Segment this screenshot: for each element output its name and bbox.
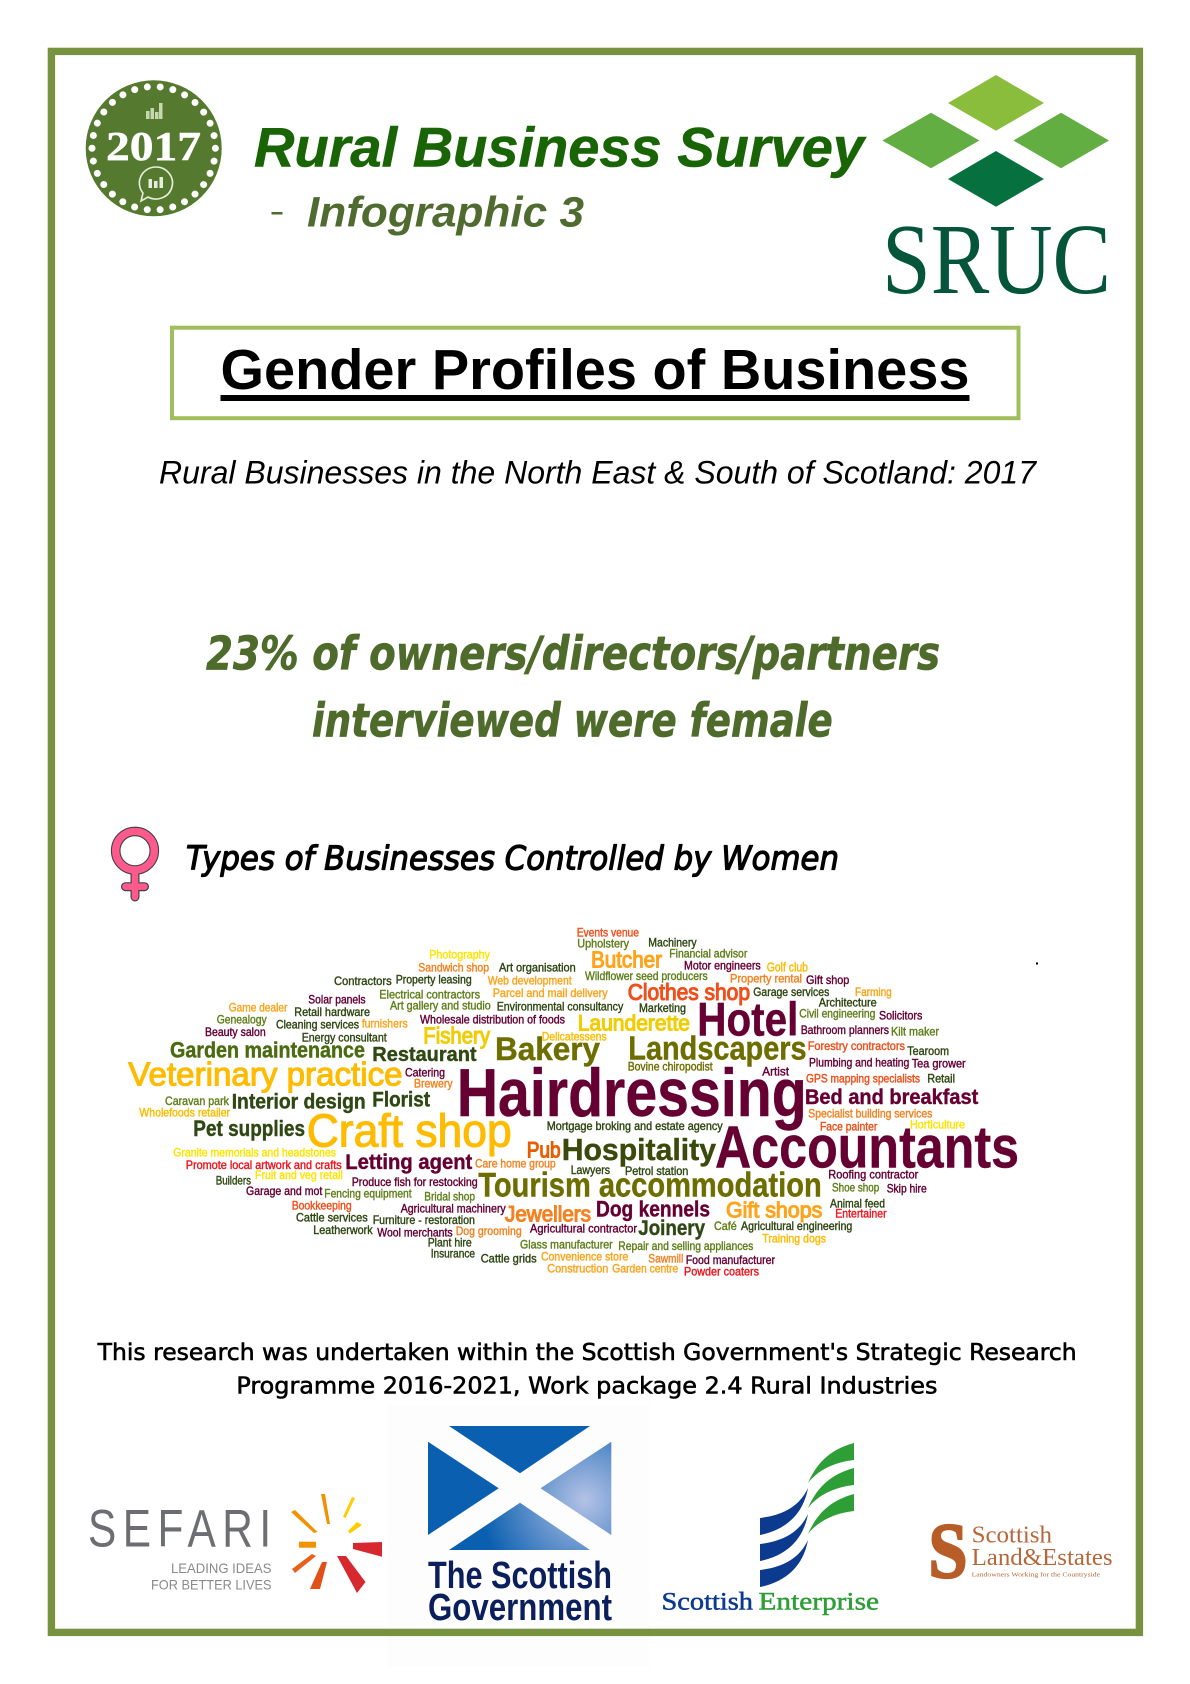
logo: Scottish Enterprise — [662, 1443, 879, 1615]
word cloud: types of businesses: GPS mapping specialists — [806, 1071, 920, 1085]
logo: Scottish Land & Estates — [928, 1507, 1113, 1594]
word cloud: types of businesses: Garage services — [753, 985, 829, 999]
icon: 2017 survey badge — [86, 80, 222, 216]
word cloud: types of businesses: Cattle grids — [481, 1251, 537, 1265]
word cloud: types of businesses: Financial advisor — [669, 947, 747, 961]
word cloud: types of businesses: Clothes shop — [628, 979, 750, 1005]
text block: research credit: This research was undertaken within the Scottish Government's Strategic Research — [97, 1340, 1077, 1366]
icon: female symbol — [116, 831, 154, 897]
word cloud: types of businesses: Repair and selling appliances — [618, 1239, 753, 1253]
word cloud: types of businesses: Garage and mot — [246, 1184, 323, 1198]
text block: research credit: Programme 2016-2021, Work package 2.4 Rural Industries — [236, 1373, 937, 1399]
word cloud: types of businesses: Restaurant — [372, 1044, 477, 1066]
logo: SRUC — [882, 75, 1111, 315]
word cloud: types of businesses: Horticulture — [910, 1117, 965, 1131]
word cloud: types of businesses: Builders — [216, 1174, 251, 1188]
word cloud: types of businesses: Butcher — [591, 947, 662, 973]
word cloud: types of businesses — [128, 926, 1038, 1278]
word cloud: types of businesses: Dog grooming — [456, 1224, 522, 1238]
word cloud: types of businesses: Leatherwork — [313, 1223, 373, 1237]
word cloud: types of businesses: Pub — [527, 1137, 561, 1162]
word cloud: types of businesses: Florist — [372, 1089, 430, 1112]
word cloud: types of businesses: Bovine chiropodist — [628, 1060, 713, 1074]
word cloud: types of businesses: Hairdressing — [457, 1055, 807, 1131]
word cloud: types of businesses: Forestry contractors — [808, 1039, 905, 1053]
word cloud: types of businesses: Animal feed — [830, 1196, 885, 1210]
word cloud: types of businesses: Mortgage broking and estate agency — [547, 1119, 723, 1133]
word cloud: types of businesses: Caravan park — [165, 1094, 230, 1108]
word cloud: types of businesses: Electrical contractors — [379, 987, 480, 1001]
word cloud: types of businesses: Gift shops — [726, 1197, 822, 1222]
word cloud: types of businesses: Architecture — [819, 996, 877, 1010]
key statistic: 23% female — [206, 626, 940, 748]
logo: The Scottish Government: Government — [428, 1587, 612, 1629]
word cloud: types of businesses: Marketing — [639, 1001, 686, 1015]
word cloud: types of businesses: Artist — [762, 1065, 790, 1079]
word cloud: types of businesses: Sawmill — [648, 1251, 683, 1265]
logo: SEFARI: FOR BETTER LIVES — [151, 1576, 272, 1592]
word cloud: types of businesses: Promote local artwork and crafts — [186, 1158, 342, 1172]
word cloud: types of businesses: Shoe shop — [832, 1181, 880, 1195]
word cloud: types of businesses: Lawyers — [571, 1163, 610, 1177]
logo: SRUC: SRUC — [882, 203, 1111, 315]
word cloud: types of businesses: Tourism accommodation — [478, 1167, 822, 1205]
icon: 2017 survey badge: 2017 — [106, 123, 201, 169]
word cloud: types of businesses: Plumbing and heating — [809, 1056, 909, 1070]
key statistic: 23% female: 23% of owners/directors/partners — [206, 626, 940, 680]
word cloud: types of businesses: Fishery — [423, 1022, 490, 1048]
logo: Scottish Land & Estates: Landowners Working for the Countryside — [972, 1572, 1100, 1579]
word cloud: types of businesses: Furniture - restoration — [373, 1213, 475, 1227]
word cloud: types of businesses: Skip hire — [887, 1181, 927, 1195]
logo: Scottish Enterprise: Scottish — [662, 1588, 754, 1615]
word cloud: types of businesses: Bathroom planners — [801, 1023, 889, 1037]
word cloud: types of businesses: Cattle services — [296, 1211, 368, 1225]
word cloud: types of businesses: Bookkeeping — [292, 1198, 352, 1212]
word cloud: types of businesses: Garden centre — [612, 1262, 679, 1276]
word cloud: types of businesses: Machinery — [648, 936, 697, 950]
word cloud: types of businesses: Dog kennels — [596, 1197, 710, 1222]
word cloud: types of businesses: Game dealer — [229, 1001, 287, 1015]
key statistic: 23% female: interviewed were female — [312, 694, 833, 748]
word cloud: types of businesses: Brewery — [414, 1076, 453, 1090]
word cloud: types of businesses: Agricultural machinery — [401, 1201, 506, 1215]
word cloud: types of businesses: Art organisation — [499, 961, 576, 975]
word cloud: types of businesses: Wool merchants — [377, 1226, 453, 1240]
word cloud: types of businesses: Café — [714, 1219, 737, 1233]
word cloud: types of businesses: Accountants — [715, 1114, 1019, 1180]
word cloud: types of businesses: Agricultural contractor — [530, 1221, 637, 1235]
word cloud: types of businesses: Parcel and mail delivery — [493, 986, 608, 1000]
word cloud: types of businesses: Environmental consultancy — [497, 999, 623, 1013]
word cloud: types of businesses: Letting agent — [345, 1151, 472, 1174]
word cloud: types of businesses: Insurance — [431, 1246, 475, 1260]
word cloud: types of businesses: Kilt maker — [891, 1025, 939, 1039]
heading box: Gender Profiles of Business — [172, 328, 1018, 418]
subtitle: Infographic 3: Infographic 3 — [307, 189, 584, 237]
word cloud: types of businesses: Solar panels — [308, 992, 366, 1006]
word cloud: types of businesses: Specialist building services — [808, 1106, 932, 1120]
logo: Scottish Land & Estates: S — [928, 1507, 968, 1594]
word cloud: types of businesses: Contractors — [334, 974, 392, 988]
word cloud: types of businesses: Entertainer — [835, 1207, 887, 1221]
word cloud: types of businesses: Upholstery — [577, 937, 629, 951]
word cloud: types of businesses: Golf club — [767, 960, 808, 975]
word cloud: types of businesses: Property rental — [730, 972, 802, 986]
logo: SEFARI: LEADING IDEAS — [171, 1560, 272, 1576]
word cloud: types of businesses: Training dogs — [762, 1232, 826, 1246]
text block: research credit — [97, 1340, 1077, 1399]
word cloud: types of businesses: Beauty salon — [205, 1025, 266, 1039]
word cloud: types of businesses: Landscapers — [628, 1029, 807, 1066]
word cloud: types of businesses: Fruit and veg retail — [255, 1168, 343, 1182]
word cloud: types of businesses: Agricultural engineering — [741, 1219, 852, 1233]
word cloud: types of businesses: Launderette — [578, 1011, 690, 1036]
word cloud: types of businesses: Photography — [429, 948, 490, 962]
word cloud: types of businesses: Wholesale distribution of foods — [420, 1012, 565, 1026]
subheading: region and year: Rural Businesses in the North East & South of Scotland: 2017 — [159, 454, 1037, 490]
word cloud: types of businesses: Retail — [927, 1071, 955, 1085]
word cloud: types of businesses: Property leasing — [396, 973, 472, 987]
word cloud: types of businesses: furnishers — [362, 1016, 408, 1030]
word cloud: types of businesses: Care home group — [475, 1157, 556, 1171]
heading: Types of Businesses Controlled by Women: Types of Businesses Controlled by Women — [186, 838, 839, 877]
word cloud: types of businesses: Hospitality — [562, 1132, 717, 1167]
word cloud: types of businesses: Granite memorials and headstones — [173, 1146, 336, 1160]
word cloud: types of businesses: Produce fish for restocking — [352, 1175, 478, 1189]
word cloud: types of businesses: Delicatessens — [542, 1030, 607, 1044]
logo: SEFARI — [88, 1494, 382, 1593]
word cloud: types of businesses: Solicitors — [879, 1008, 922, 1022]
word cloud: types of businesses: Retail hardware — [294, 1005, 370, 1019]
word cloud: types of businesses: Joinery — [638, 1217, 705, 1240]
word cloud: types of businesses: Catering — [405, 1066, 445, 1080]
word cloud: types of businesses: Food manufacturer — [686, 1253, 775, 1267]
word cloud: types of businesses: Interior design — [232, 1090, 366, 1113]
word cloud: types of businesses: Civil engineering — [799, 1007, 875, 1021]
word cloud: types of businesses: Sandwich shop — [418, 961, 489, 975]
logo: Scottish Enterprise: Enterprise — [758, 1588, 879, 1615]
word cloud: types of businesses: Petrol station — [625, 1164, 688, 1178]
word cloud: types of businesses: Wholefoods retailer — [139, 1106, 230, 1120]
word cloud: types of businesses: Cleaning services — [276, 1017, 359, 1031]
word cloud: types of businesses: Craft shop — [307, 1105, 512, 1157]
word cloud: types of businesses: Farming — [855, 985, 892, 999]
word cloud: types of businesses: Bridal shop — [424, 1190, 475, 1204]
word cloud: types of businesses: Genealogy — [217, 1012, 267, 1026]
title: Rural Business Survey: Rural Business Survey — [254, 116, 867, 179]
word cloud: types of businesses: Face painter — [820, 1120, 877, 1134]
word cloud: types of businesses: Veterinary practice — [128, 1056, 403, 1093]
heading box: Gender Profiles of Business: Gender Profiles of Business — [220, 338, 970, 402]
word cloud: types of businesses: Bakery — [495, 1031, 600, 1067]
word cloud: types of businesses: Wildflower seed producers — [585, 969, 708, 983]
word cloud: types of businesses: Garden maintenance — [170, 1038, 365, 1063]
logo: The Scottish Government: The Scottish — [428, 1555, 612, 1597]
word cloud: types of businesses: Tearoom — [907, 1044, 949, 1058]
word cloud: types of businesses: Art gallery and studio — [390, 998, 491, 1012]
logo: Scottish Land & Estates: Land&Estates — [972, 1545, 1113, 1571]
word cloud: types of businesses: Pet supplies — [193, 1116, 305, 1141]
word cloud: types of businesses: Events venue — [577, 926, 639, 940]
word cloud: types of businesses: Plant hire — [428, 1236, 472, 1250]
logo: SEFARI: SEFARI — [88, 1500, 271, 1559]
word cloud: types of businesses: Glass manufacturer — [520, 1237, 613, 1251]
logo: Scottish Land & Estates: Scottish — [972, 1523, 1052, 1549]
word cloud: types of businesses: Jewellers — [505, 1202, 591, 1227]
word cloud: types of businesses: Tea grower — [912, 1057, 966, 1071]
word cloud: types of businesses: Gift shop — [806, 973, 850, 987]
word cloud: types of businesses: Web development — [488, 973, 572, 987]
word cloud: types of businesses: Roofing contractor — [828, 1167, 918, 1181]
word cloud: types of businesses: Motor engineers — [684, 958, 761, 972]
word cloud: types of businesses: Fencing equipment — [324, 1186, 412, 1200]
word cloud: types of businesses: Hotel — [697, 993, 798, 1046]
logo: The Scottish Government — [428, 1426, 612, 1629]
word cloud: types of businesses: Construction — [547, 1261, 608, 1275]
word cloud: types of businesses: Energy consultant — [302, 1031, 387, 1045]
word cloud: types of businesses: Bed and breakfast — [805, 1086, 978, 1109]
word cloud: types of businesses: Powder coaters — [684, 1264, 759, 1278]
word cloud: types of businesses: Convenience store — [541, 1250, 629, 1264]
